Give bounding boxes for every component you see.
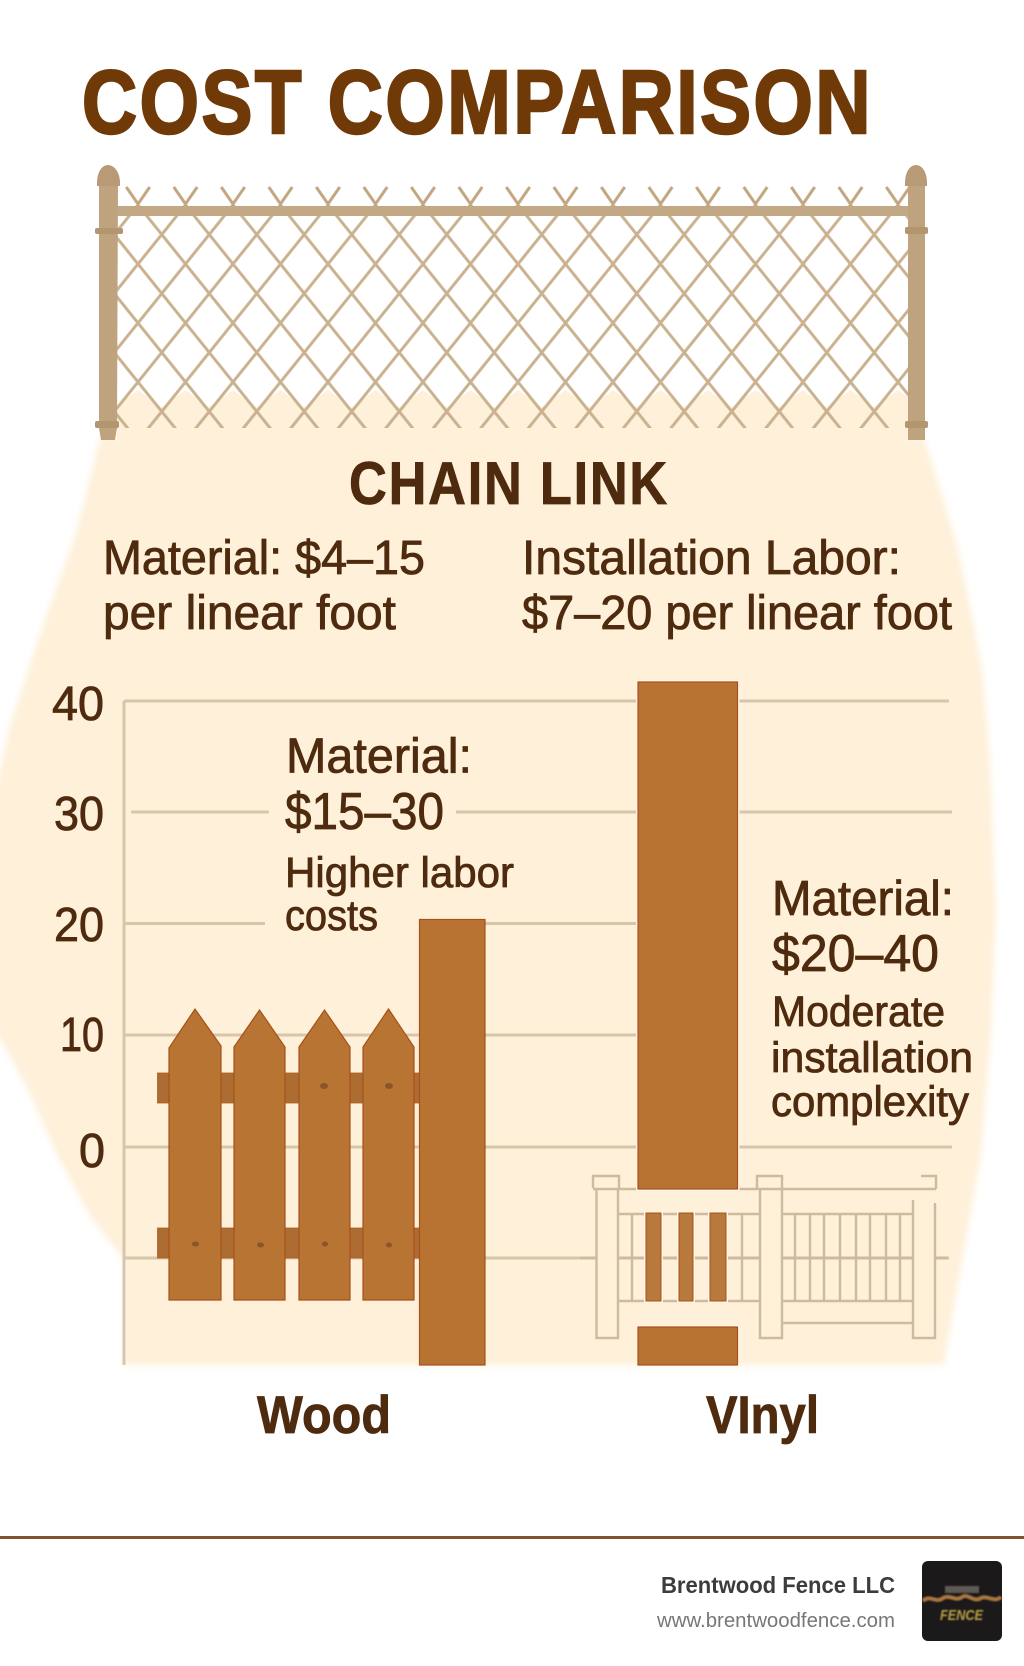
y axis labels: 10 [60, 1009, 104, 1062]
footer url: www.brentwoodfence.com [656, 1610, 895, 1632]
vinyl callout: Material: [772, 872, 954, 926]
footer logo [922, 1561, 1002, 1641]
vinyl callout: Moderate [772, 988, 945, 1036]
bar: vinyl [636, 680, 740, 1365]
bar: wood [420, 920, 485, 1365]
wood callout: costs [285, 892, 378, 940]
y axis labels: 20 [54, 899, 104, 952]
chain link fence illustration [95, 165, 928, 442]
category label: vinyl: VInyl [706, 1386, 819, 1445]
footer rule [0, 1536, 1024, 1539]
y axis labels: 30 [54, 788, 104, 841]
y axis labels: 40 [52, 678, 104, 731]
wood callout [285, 730, 514, 940]
chain link material text [103, 532, 425, 640]
title: COST COMPARISON [82, 53, 873, 153]
wood fence illustration [158, 1009, 420, 1300]
wood callout: Higher labor [285, 849, 514, 897]
footer company name: Brentwood Fence LLC [661, 1572, 895, 1598]
category label: wood: Wood [257, 1386, 391, 1445]
chain link material text: Material: $4–15 [103, 532, 425, 585]
vinyl fence illustration [580, 1176, 948, 1340]
cream background panel [0, 438, 996, 1365]
heading: chain link: CHAIN LINK [349, 450, 669, 517]
chain link installation labor text: $7–20 per linear foot [522, 587, 952, 640]
chain link installation labor text [522, 532, 952, 640]
chain link material text: per linear foot [103, 587, 396, 640]
wood callout: Material: [286, 730, 472, 784]
wood callout: $15–30 [285, 783, 444, 841]
vinyl callout: complexity [771, 1078, 969, 1126]
vinyl callout [771, 872, 973, 1126]
vinyl callout: $20–40 [772, 925, 939, 983]
chart gridlines and axis [124, 701, 952, 1365]
vinyl callout: installation [771, 1034, 973, 1082]
y axis labels: 0 [79, 1125, 105, 1178]
footer logo: FENCE [940, 1607, 984, 1624]
y axis labels [52, 678, 105, 1178]
chain link installation labor text: Installation Labor: [522, 532, 901, 585]
